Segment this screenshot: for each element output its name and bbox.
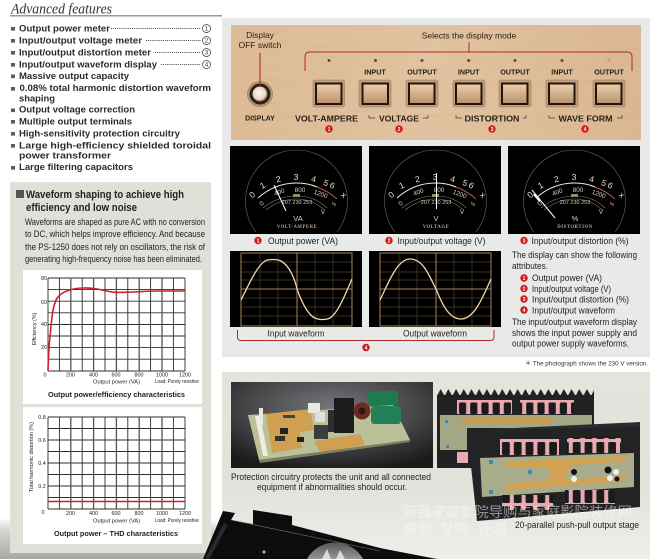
meter: voltage: 2 (414, 174, 421, 184)
panel body text: generating high-frequency noise has been eliminated. (25, 254, 202, 264)
line chart: output power / THD: Load: Purely resistive (155, 518, 199, 524)
input output labels: INPUT (458, 68, 480, 76)
line chart: output power / THD: 1000 (156, 511, 168, 517)
display attributes text: 4 (523, 308, 526, 314)
line chart: output power / efficiency: 600 (112, 372, 120, 378)
display off switch: DISPLAY (245, 116, 275, 122)
display attributes text: Input/output waveform (532, 306, 615, 316)
wood control panel (231, 25, 641, 140)
feature list (11, 24, 211, 173)
waveform: input (230, 251, 362, 327)
meter: volt-ampere: VA (330, 200, 338, 208)
numbered badges: 3 (491, 127, 494, 133)
line chart: output power / THD: Output power – THD characteristics (54, 529, 178, 538)
line chart: output power / efficiency: 80 (41, 276, 47, 282)
watermark: 评测 (478, 521, 507, 538)
display attributes text: attributes. (512, 261, 548, 271)
line chart: output power / THD: 800 (134, 511, 144, 517)
meter: volt-ampere: 0 (247, 189, 257, 200)
feature list: Input/output distortion meter (19, 48, 151, 58)
meter: distortion: VA (608, 200, 616, 208)
panel heading: efficiency and low noise (26, 202, 137, 214)
display attributes text: shows the input power supply and (512, 328, 637, 338)
watermark: 导购 (440, 521, 469, 538)
meter: voltage: V (460, 209, 465, 216)
line chart: output power / efficiency: 0 (44, 372, 46, 378)
meter: volt-ampere: x (339, 190, 349, 200)
numbered badges: 1 (328, 127, 331, 133)
meter caption: input output distortion: Input/output distortion (%) (532, 236, 628, 246)
display attributes text: Output power (VA) (532, 273, 602, 283)
watermark (403, 504, 632, 538)
watermark: 案例 (403, 520, 432, 538)
meter: voltage: 207 230 253 (421, 200, 451, 206)
line chart: output power / THD: 0 (42, 510, 44, 516)
meter: voltage: x (478, 190, 488, 200)
meter: voltage (369, 146, 501, 234)
photo caption: protection circuitry: equipment if abnormalities should occur. (257, 482, 407, 492)
meter: volt-ampere: VA (293, 214, 303, 223)
line chart: output power / efficiency: 400 (89, 372, 98, 378)
meter: volt-ampere: VOLT-AMPERE (277, 225, 317, 230)
panel heading: Waveform shaping to achieve high (26, 189, 184, 201)
mode names: VOLTAGE (379, 114, 420, 124)
watermark: 阿强家庭影院导购与家庭影院装修网 (403, 504, 632, 521)
photo: protection circuit board (231, 382, 433, 468)
feature list: Large high-efficiency shielded toroidal (19, 140, 211, 152)
line chart: output power / efficiency: Output power/efficiency characteristics (48, 390, 185, 399)
mode indicators (328, 59, 611, 62)
feature list: 4 (205, 63, 209, 69)
line chart: output power / THD: Total harmonic distortion (%) (29, 422, 35, 492)
numbered badges (325, 125, 589, 133)
meter: voltage: 1 (397, 180, 406, 191)
input output labels: INPUT (364, 68, 386, 76)
meter: distortion: 0 (536, 200, 544, 208)
meter: volt-ampere: 4 (310, 174, 317, 185)
feature list: Large filtering capacitors (19, 162, 133, 173)
panel body text (25, 217, 205, 264)
bottom-left shading (0, 518, 222, 559)
line chart: output power / efficiency: Efficiency (%) (32, 312, 38, 345)
meter: voltage: 0 (397, 200, 405, 208)
waveform captions and bracket: Input waveform (268, 328, 324, 338)
meter: voltage: 6 (467, 180, 476, 191)
feature list: Multiple output terminals (19, 116, 132, 128)
meter: distortion: 4 (588, 174, 595, 185)
mode names: VOLT-AMPERE (295, 114, 359, 124)
line chart: output power / efficiency: Load: Purely resistive (155, 379, 199, 385)
panel body text: Waveforms are shaped as pure AC with no conversion (25, 217, 205, 227)
line chart: output power / THD: 200 (66, 511, 75, 517)
meter: distortion: 0 (525, 189, 535, 200)
photo caption: protection circuitry (231, 472, 431, 492)
feature list: 2 (205, 39, 209, 45)
meter: distortion (508, 146, 640, 234)
display attributes text (512, 250, 637, 348)
meter: volt-ampere: 207 230 253 (282, 200, 312, 206)
input output labels (364, 68, 624, 76)
line chart: output power / THD: 0.2 (38, 484, 46, 490)
meter: distortion: 1 (536, 180, 545, 191)
line chart: output power / THD: 0.6 (38, 438, 46, 444)
line chart: output power / efficiency: 200 (66, 372, 75, 378)
mode buttons (313, 80, 625, 107)
meter: volt-ampere: 5 (322, 177, 330, 188)
display off switch (239, 30, 282, 122)
meter: distortion: 5 (600, 177, 608, 188)
meter: voltage: 3 (433, 172, 438, 182)
numbered badges: 2 (398, 127, 401, 133)
title: Advanced features: Advanced features (10, 2, 112, 18)
feature list: Input/output voltage meter (19, 36, 142, 46)
meter: volt-ampere: 1200 (313, 189, 329, 200)
selects the display mode bracket: Selects the display mode (422, 30, 517, 40)
meter: volt-ampere: 0 (258, 200, 266, 208)
feature list: shaping (19, 94, 55, 104)
meter: distortion: x (617, 190, 627, 200)
display attributes text: 3 (523, 297, 526, 303)
meter caption: input output distortion: 3 (523, 238, 526, 244)
line chart: output power / efficiency: 800 (134, 372, 144, 378)
selects the display mode bracket (305, 30, 632, 71)
display attributes text: Input/output distortion (%) (532, 294, 629, 304)
line chart: output power / THD: 600 (112, 511, 120, 517)
display off switch: Display (246, 30, 275, 40)
input output labels: OUTPUT (594, 68, 624, 76)
meter: voltage: 4 (449, 174, 456, 185)
meter caption: output power: 1 (257, 238, 260, 244)
photo caption: output stage: 20-parallel push-pull output stage (515, 520, 639, 530)
meter caption: input output voltage: 2 (388, 238, 391, 244)
meter: distortion: 3 (572, 172, 577, 182)
display attributes text: The input/output waveform display (512, 317, 637, 327)
input output labels: OUTPUT (500, 68, 530, 76)
meter caption: output power: Output power (VA) (268, 236, 338, 246)
meter: distortion: V (599, 209, 604, 216)
display attributes text: Input/output voltage (V) (532, 284, 611, 294)
meter: distortion: 6 (606, 180, 615, 191)
meter caption: input output voltage: Input/output voltage (V) (398, 236, 486, 246)
meter: distortion: 1200 (591, 189, 607, 200)
photo: power amplifier boards (437, 388, 640, 521)
meter: distortion: 2 (553, 174, 560, 184)
display attributes text: The display can show the following (512, 250, 637, 260)
line chart: output power / efficiency: 1200 (179, 372, 191, 378)
line chart: output power / efficiency (23, 270, 202, 404)
panel body text: the PS-1250 does not rely on oscillators, the risk of (25, 242, 205, 252)
meter: distortion: 800 (573, 187, 584, 194)
meter: voltage: 0 (386, 189, 396, 200)
display attributes text: output power supply waveforms. (512, 338, 629, 348)
feature list: power transformer (19, 150, 111, 162)
meter: voltage: VA (469, 200, 477, 208)
amplifier chassis (203, 510, 437, 559)
line chart: output power / THD: 1200 (179, 511, 191, 517)
line chart: output power / efficiency: Output power (VA) (93, 380, 140, 386)
line chart: output power / THD: Output power (VA) (93, 518, 140, 524)
display off switch: OFF switch (239, 40, 282, 50)
panel body text: to DC, which helps improve efficiency. And because (25, 229, 205, 239)
line chart: output power / efficiency: 40 (41, 322, 47, 328)
meter: voltage: VOLTAGE (423, 225, 449, 230)
input output labels: INPUT (551, 68, 573, 76)
meter: distortion: 207 230 253 (560, 200, 590, 206)
input output labels: OUTPUT (407, 68, 437, 76)
line chart: output power / THD (23, 407, 202, 544)
feature list: 3 (205, 51, 209, 57)
meter: distortion: % (572, 214, 579, 223)
panel heading (16, 189, 184, 214)
numbered badges: 4 (584, 127, 587, 133)
mode names: DISTORTION (464, 114, 520, 124)
meter: volt-ampere: 1 (258, 180, 267, 191)
line chart: output power / efficiency: 60 (41, 300, 47, 306)
mode names (295, 114, 613, 124)
feature list: 0.08% total harmonic distortion waveform (20, 83, 211, 94)
mode names: WAVE FORM (558, 114, 613, 124)
meter: volt-ampere: 400 (273, 187, 286, 198)
line chart: output power / efficiency: 20 (41, 345, 47, 351)
meter: volt-ampere: 6 (328, 180, 337, 191)
meter: distortion: DISTORTION (557, 225, 593, 230)
line chart: output power / THD: 0.4 (38, 461, 46, 467)
feature list: High-sensitivity protection circuitry (19, 128, 181, 140)
meter: volt-ampere: 2 (275, 174, 282, 184)
meter: voltage: 800 (434, 187, 445, 194)
panel: lower circuitry section (222, 372, 650, 559)
feature list: Output power meter (19, 24, 110, 34)
meter: volt-ampere (230, 146, 362, 234)
meter: voltage: V (433, 214, 439, 223)
line chart: output power / efficiency: 1000 (156, 372, 168, 378)
waveform captions and bracket: 4 (365, 345, 368, 351)
meter: volt-ampere: 3 (294, 172, 299, 182)
meter: voltage: 5 (461, 177, 469, 188)
line chart: output power / THD: 0.8 (38, 415, 46, 421)
panel: waveform shaping (10, 182, 211, 553)
feature list: Massive output capacity (19, 71, 130, 82)
line chart: output power / THD: 400 (89, 511, 98, 517)
display attributes text: 1 (523, 276, 526, 282)
waveform: output (369, 251, 501, 327)
photo caption: protection circuitry: Protection circuitry protects the unit and all connected (231, 472, 431, 482)
display attributes text: 2 (523, 286, 526, 292)
meter: distortion: 400 (551, 187, 564, 198)
panel: display section background (222, 18, 650, 357)
feature list: Output voltage correction (19, 104, 135, 116)
meter: volt-ampere: 800 (295, 187, 306, 194)
footnote: ＊ The photograph shows the 230 V version. (525, 360, 648, 368)
meter: voltage: 400 (412, 187, 425, 198)
waveform captions and bracket (238, 328, 494, 351)
meter: volt-ampere: V (321, 209, 326, 216)
meter: voltage: 1200 (452, 189, 468, 200)
feature list: Input/output waveform display (19, 60, 158, 70)
feature list: 1 (205, 27, 209, 33)
waveform captions and bracket: Output waveform (403, 328, 467, 338)
